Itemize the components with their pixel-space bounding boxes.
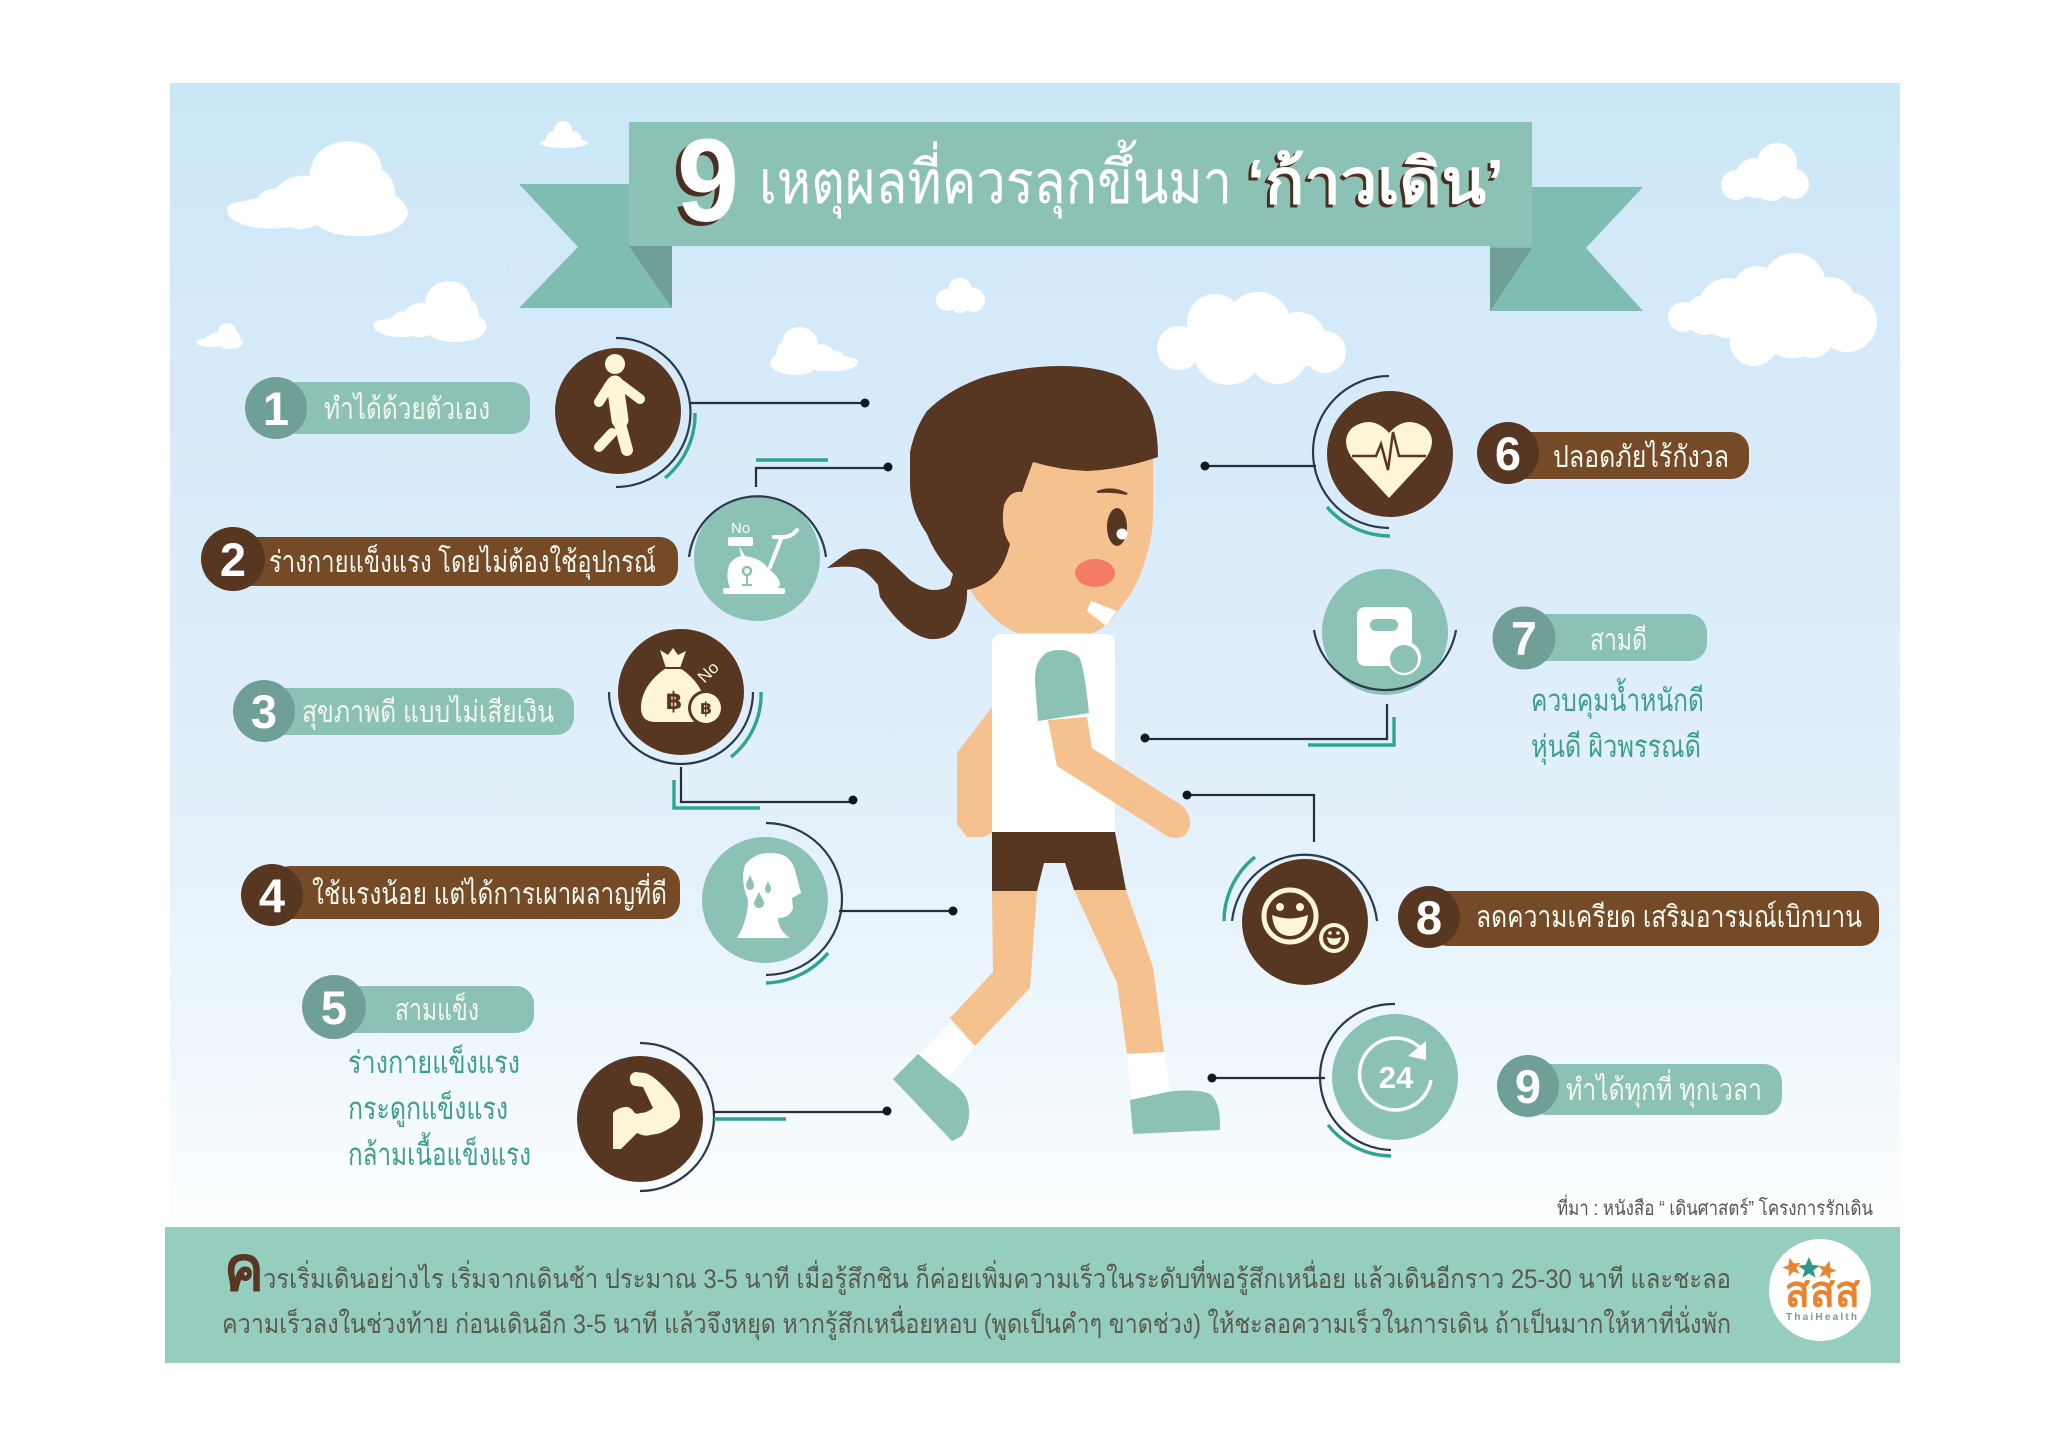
front arm — [1048, 717, 1190, 838]
item 5: samkhaeng strong — [302, 975, 892, 1191]
number badge 8 — [1398, 886, 1460, 948]
detail text 7 — [1531, 678, 1704, 766]
dot 5 — [882, 1106, 892, 1116]
mouth — [1087, 601, 1117, 626]
back arm — [957, 707, 994, 837]
dot 6 — [1200, 462, 1210, 470]
accent arc 3 — [731, 692, 761, 757]
accent line 3 — [674, 780, 760, 808]
label text 7: สามดี — [1590, 624, 1647, 657]
title highlighted word: ‘ก้าวเดิน’ — [1244, 151, 1501, 220]
label text 3: สุขภาพดี แบบไม่เสียเงิน — [302, 694, 554, 731]
back sock — [920, 1022, 975, 1079]
title ribbon — [519, 115, 1643, 311]
ring 3 — [609, 692, 753, 764]
label pill 6 — [1508, 432, 1749, 479]
icon: 24-hour clock — [1332, 1014, 1458, 1140]
footer background — [165, 1227, 1900, 1363]
ring 6 — [1313, 376, 1389, 528]
number badge 4 — [241, 864, 303, 926]
eye — [1107, 508, 1127, 546]
connector 9 — [1212, 1077, 1325, 1079]
back shoe — [893, 1054, 969, 1141]
icon: money bags — [618, 629, 744, 755]
ribbon right fold — [1490, 248, 1532, 311]
icon: heart with pulse — [1327, 391, 1453, 517]
item 2: strong body without equipment — [201, 460, 892, 621]
number 1: 1 — [263, 382, 289, 435]
ring 4 — [766, 823, 842, 975]
number badge 1 — [245, 377, 307, 439]
footer text line 2: ความเร็วลงในช่วงท้าย ก่อนเดินอีก 3-5 นาที แล้วจึงหยุด หากรู้สึกเหนื่อยหอบ (พูดเป็นคำๆ ขาดช่วง) ให้ชะลอความเร็วในการเดิน ถ้าเป็นมากให้หาที่นั่งพัก — [222, 1305, 1731, 1341]
footer text line 1: วรเริ่มเดินอย่างไร เริ่มจากเดินช้า ประมาณ 3-5 นาที เมื่อรู้สึกชิน ก็ค่อยเพิ่มความเร็วในระดับที่พอรู้สึกเหนื่อย แล้วเดินอีกราว 25-30 นาที และชะลอ — [263, 1260, 1731, 1295]
dot 8 — [1182, 790, 1192, 800]
front shoe — [1130, 1090, 1220, 1134]
source note: ที่มา : หนังสือ “ เดินศาสตร์” โครงการรักเดิน — [1557, 1194, 1873, 1220]
footer panel — [165, 1227, 1900, 1363]
icon: scale and apple — [1322, 569, 1448, 695]
sleeve — [1035, 650, 1089, 721]
head — [970, 440, 1153, 633]
number 4: 4 — [259, 869, 285, 922]
number 7: 7 — [1511, 612, 1537, 665]
icon: 24-hour clock: 24 — [1379, 1060, 1414, 1095]
number 8: 8 — [1416, 891, 1442, 944]
ring 7 — [1314, 630, 1456, 690]
title text: เหตุผลที่ควรลุกขึ้นมา — [759, 139, 1232, 219]
item 4: low effort, good burn — [241, 823, 958, 983]
detail text 5: กระดูกแข็งแรง — [348, 1090, 508, 1127]
connector 1 — [689, 402, 864, 404]
detail text 5 — [348, 1044, 531, 1172]
ring 9 — [1320, 1004, 1395, 1150]
ribbon main band — [629, 122, 1532, 246]
title highlighted word: ‘ก้าวเดิน’ — [1247, 148, 1504, 217]
connector 6 — [1205, 465, 1316, 467]
dot 7 — [1140, 734, 1150, 742]
item 7: samdee — [1140, 569, 1707, 766]
label text 1: ทำได้ด้วยตัวเอง — [324, 391, 490, 426]
eye highlight — [1116, 528, 1128, 540]
label pill 7 — [1524, 614, 1707, 661]
label text 5: สามแข็ง — [395, 991, 479, 1027]
number 5: 5 — [321, 981, 347, 1034]
connector 8 — [1186, 795, 1314, 842]
label pill 2 — [233, 537, 678, 586]
connector 7 — [1145, 704, 1387, 739]
item 1: do it yourself — [245, 338, 870, 487]
icon: money bags: ฿ — [666, 688, 682, 715]
icon: money bags: ฿ — [700, 699, 712, 718]
accent arc 9 — [1328, 1125, 1391, 1156]
accent line 5 — [714, 1117, 786, 1121]
cheek — [1075, 559, 1115, 587]
clouds — [197, 121, 1877, 385]
sky background panel — [170, 83, 1900, 1227]
icon: walker — [555, 348, 681, 474]
icon: smiling faces — [1242, 859, 1368, 985]
ribbon left fold — [629, 246, 672, 308]
ribbon right tail — [1490, 187, 1643, 311]
icon: sweating head — [702, 837, 828, 963]
hair and ponytail — [827, 366, 1158, 639]
ear — [991, 498, 1019, 538]
ThaiHealth logo: สสส — [1785, 1268, 1860, 1315]
connector 4 — [839, 910, 953, 912]
accent line 7 — [1308, 717, 1394, 745]
title number 9: 9 — [677, 115, 739, 247]
ribbon left tail — [519, 184, 672, 308]
accent arc 4 — [766, 953, 828, 983]
number badge 2 — [201, 527, 265, 591]
ring 1 — [616, 338, 690, 487]
number 9: 9 — [1515, 1060, 1541, 1113]
connector 3 — [681, 767, 853, 802]
number badge 7 — [1492, 606, 1556, 670]
ring 2 — [689, 496, 826, 557]
dot 3 — [848, 796, 858, 804]
label pill 3 — [264, 688, 574, 735]
front sock — [1127, 1052, 1170, 1100]
shorts — [992, 832, 1126, 891]
footer drop cap: ค — [224, 1235, 264, 1304]
number badge 9 — [1497, 1055, 1559, 1117]
item 3: healthy without spending — [233, 629, 858, 808]
eyebrow — [1097, 489, 1127, 494]
accent line 2 — [756, 458, 828, 462]
detail text 5: ร่างกายแข็งแรง — [348, 1044, 520, 1080]
label pill 4 — [272, 866, 680, 919]
number 6: 6 — [1495, 427, 1521, 480]
icon: flexed arm — [577, 1056, 703, 1182]
number badge 3 — [233, 680, 295, 742]
detail text 7: หุ่นดี ผิวพรรณดี — [1531, 729, 1701, 766]
label text 9: ทำได้ทุกที่ ทุกเวลา — [1566, 1069, 1762, 1109]
number 3: 3 — [251, 685, 277, 738]
accent arc 1 — [665, 413, 695, 478]
label pill 1 — [276, 382, 530, 434]
dot 2 — [884, 462, 892, 472]
item 6: safe worry free — [1200, 376, 1749, 536]
connector 5 — [713, 1111, 887, 1113]
detail text 7: ควบคุมน้ำหนักดี — [1531, 678, 1704, 720]
ring 5 — [640, 1043, 714, 1191]
number 2: 2 — [220, 533, 246, 586]
title number 9: 9 — [672, 119, 734, 251]
label text 4: ใช้แรงน้อย แต่ได้การเผาผลาญที่ดี — [312, 873, 667, 911]
label pill 5 — [334, 986, 534, 1033]
item 9: anywhere anytime — [1208, 1004, 1782, 1156]
ring 8 — [1232, 855, 1377, 921]
connector 2 — [756, 468, 886, 487]
icon: money bags: No — [694, 658, 723, 687]
ThaiHealth logo — [1769, 1239, 1871, 1341]
icon: exercise bike — [694, 495, 820, 621]
front leg — [1074, 890, 1164, 1054]
detail text 5: กล้ามเนื้อแข็งแรง — [348, 1132, 531, 1172]
label text 6: ปลอดภัยไร้กังวล — [1553, 439, 1729, 474]
item 8: reduce stress — [1182, 790, 1879, 985]
back leg — [950, 891, 1037, 1046]
icon: exercise bike: No — [731, 520, 750, 537]
dot 4 — [948, 906, 958, 916]
shirt — [992, 634, 1115, 832]
number badge 5 — [302, 975, 366, 1039]
label pill 9 — [1528, 1064, 1782, 1115]
dot 9 — [1208, 1074, 1216, 1082]
accent arc 8 — [1224, 857, 1255, 921]
label pill 8 — [1429, 891, 1879, 946]
label text 2: ร่างกายแข็งแรง โดยไม่ต้องใช้อุปกรณ์ — [269, 543, 656, 581]
number badge 6 — [1477, 422, 1539, 484]
accent arc 6 — [1327, 507, 1390, 536]
ThaiHealth logo: ThaiHealth — [1786, 1312, 1857, 1323]
walking girl illustration — [827, 366, 1220, 1141]
dot 1 — [860, 398, 870, 408]
label text 8: ลดความเครียด เสริมอารมณ์เบิกบาน — [1476, 900, 1862, 934]
